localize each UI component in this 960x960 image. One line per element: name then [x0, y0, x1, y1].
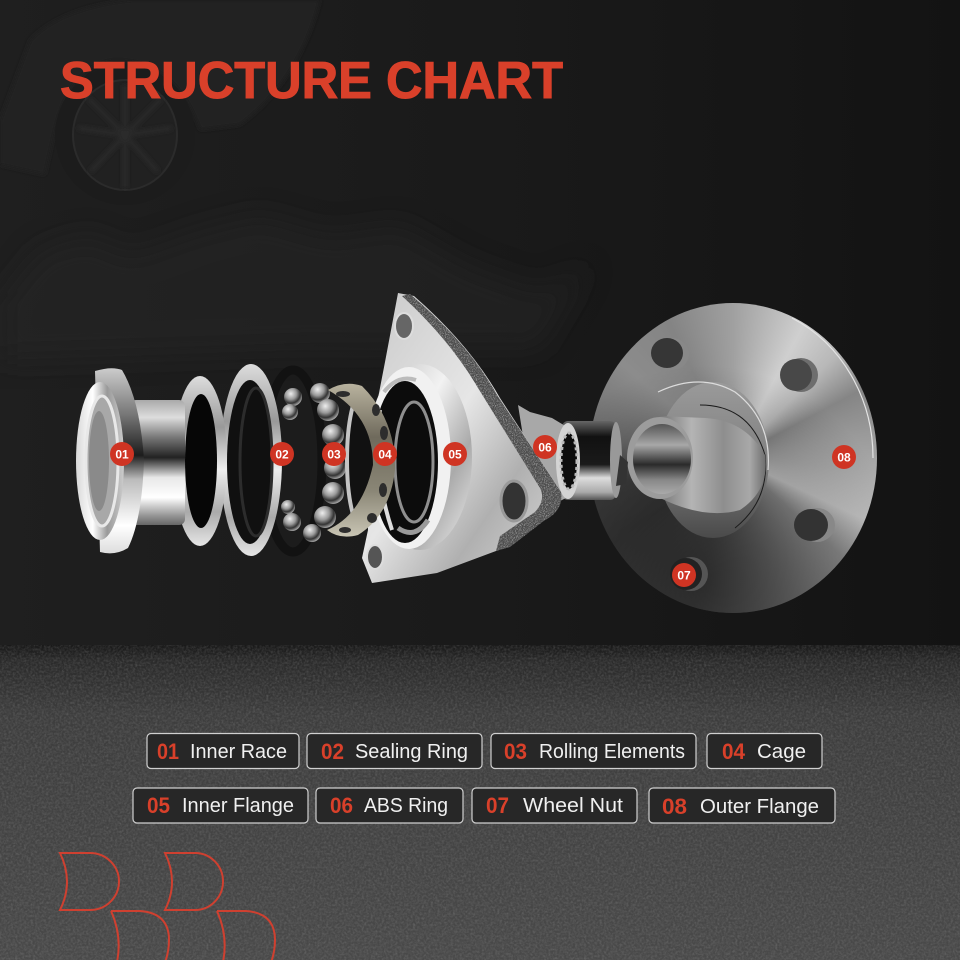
badge 08	[832, 445, 856, 469]
legend: 02 Sealing Ring	[307, 734, 482, 768]
legend: 06 ABS Ring	[316, 788, 463, 823]
legend: 04 Cage: 04	[722, 739, 746, 764]
legend: 04 Cage	[707, 734, 822, 768]
part 01: inner race	[76, 368, 185, 553]
legend: 05 Inner Flange	[133, 788, 308, 823]
legend: 05 Inner Flange: 05	[147, 793, 170, 818]
background wall	[0, 0, 960, 660]
badge 03	[322, 442, 346, 466]
legend: 02 Sealing Ring: Sealing Ring	[355, 741, 468, 763]
raised hub	[657, 382, 769, 538]
legend: 05 Inner Flange: Inner Flange	[182, 795, 294, 817]
badge 08: 08	[837, 450, 851, 464]
badge 04: 04	[378, 448, 392, 462]
badge 04	[373, 442, 397, 466]
legend: 07 Wheel Nut: Wheel Nut	[523, 795, 623, 817]
legend: 08 Outer Flange	[649, 788, 835, 823]
sealing ring back	[264, 370, 322, 552]
badge 06	[533, 435, 557, 459]
legend: 01 Inner Race	[147, 734, 299, 768]
badge 03: 03	[327, 448, 341, 462]
legend: 04 Cage: Cage	[757, 741, 806, 763]
small spacer ring	[173, 376, 227, 546]
legend	[133, 734, 835, 823]
legend: 01 Inner Race: Inner Race	[190, 741, 287, 763]
number badges	[110, 435, 856, 587]
part 05: inner flange	[362, 293, 561, 583]
badge 01	[110, 442, 134, 466]
legend: 08 Outer Flange: Outer Flange	[700, 796, 819, 818]
legend: 03 Rolling Elements: Rolling Elements	[539, 741, 685, 763]
legend: 06 ABS Ring: ABS Ring	[364, 795, 448, 817]
part 03: rolling elements	[264, 383, 346, 542]
legend: 08 Outer Flange: 08	[662, 794, 687, 819]
title: STRUCTURE CHART	[60, 52, 563, 110]
legend: 01 Inner Race: 01	[157, 739, 179, 764]
badge 07	[672, 563, 696, 587]
floor	[0, 645, 960, 960]
legend: 07 Wheel Nut: 07	[486, 793, 509, 818]
part 04: cage	[327, 384, 395, 537]
legend: 02 Sealing Ring: 02	[321, 739, 344, 764]
legend: 06 ABS Ring: 06	[330, 793, 353, 818]
badge 06: 06	[538, 440, 552, 454]
part 02: sealing ring	[220, 364, 282, 556]
badge 07: 07	[677, 568, 691, 582]
badge 05: 05	[448, 448, 462, 462]
bolt holes	[395, 313, 413, 339]
spindle	[660, 416, 766, 513]
nuts	[651, 338, 835, 591]
legend: 03 Rolling Elements	[491, 734, 696, 768]
badge 02: 02	[275, 448, 289, 462]
part 08: outer flange disc	[589, 303, 877, 613]
decorative D shapes	[60, 853, 275, 960]
badge 01: 01	[115, 448, 129, 462]
badge 02	[270, 442, 294, 466]
legend: 07 Wheel Nut	[472, 788, 637, 823]
badge 05	[443, 442, 467, 466]
part 06: ABS ring and splined shaft	[518, 405, 628, 505]
legend: 03 Rolling Elements: 03	[504, 739, 527, 764]
background: faint car and rocks	[0, 0, 590, 360]
